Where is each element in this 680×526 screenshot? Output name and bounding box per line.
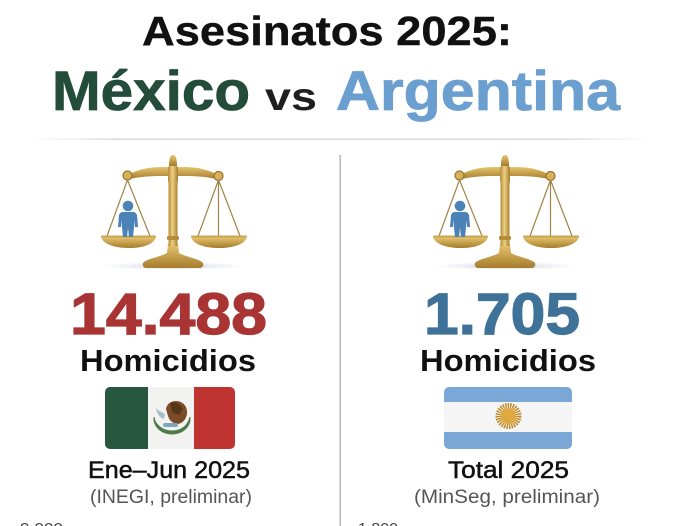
label: Homicidios, México: Homicidios: [80, 343, 256, 378]
heading: México vs Argentina: Argentina: [336, 59, 621, 122]
icon: flag of México: [105, 387, 235, 449]
number: México homicides: 14.488: [70, 282, 267, 347]
panel: Argentina: [358, 155, 600, 526]
text: source, México: (INEGI, preliminar): [90, 487, 252, 508]
heading: México vs Argentina: [52, 59, 621, 122]
number: Argentina homicides: 1.705: [424, 282, 580, 347]
heading: México vs Argentina: México: [52, 59, 250, 122]
panel: México: [20, 155, 267, 526]
heading: México vs Argentina: vs: [265, 76, 317, 119]
title: Asesinatos 2025: Asesinatos 2025:: [142, 8, 512, 54]
text: source, Argentina: (MinSeg, preliminar): [414, 487, 600, 508]
icon: scales of justice, Argentina: [433, 155, 579, 270]
icon: scales of justice, México: [101, 155, 247, 270]
label: Homicidios, Argentina: Homicidios: [420, 343, 596, 378]
text: period, Argentina: Total 2025: [448, 457, 569, 484]
icon: flag of Argentina: [444, 387, 572, 449]
text: period, México: Ene–Jun 2025: [88, 457, 250, 484]
